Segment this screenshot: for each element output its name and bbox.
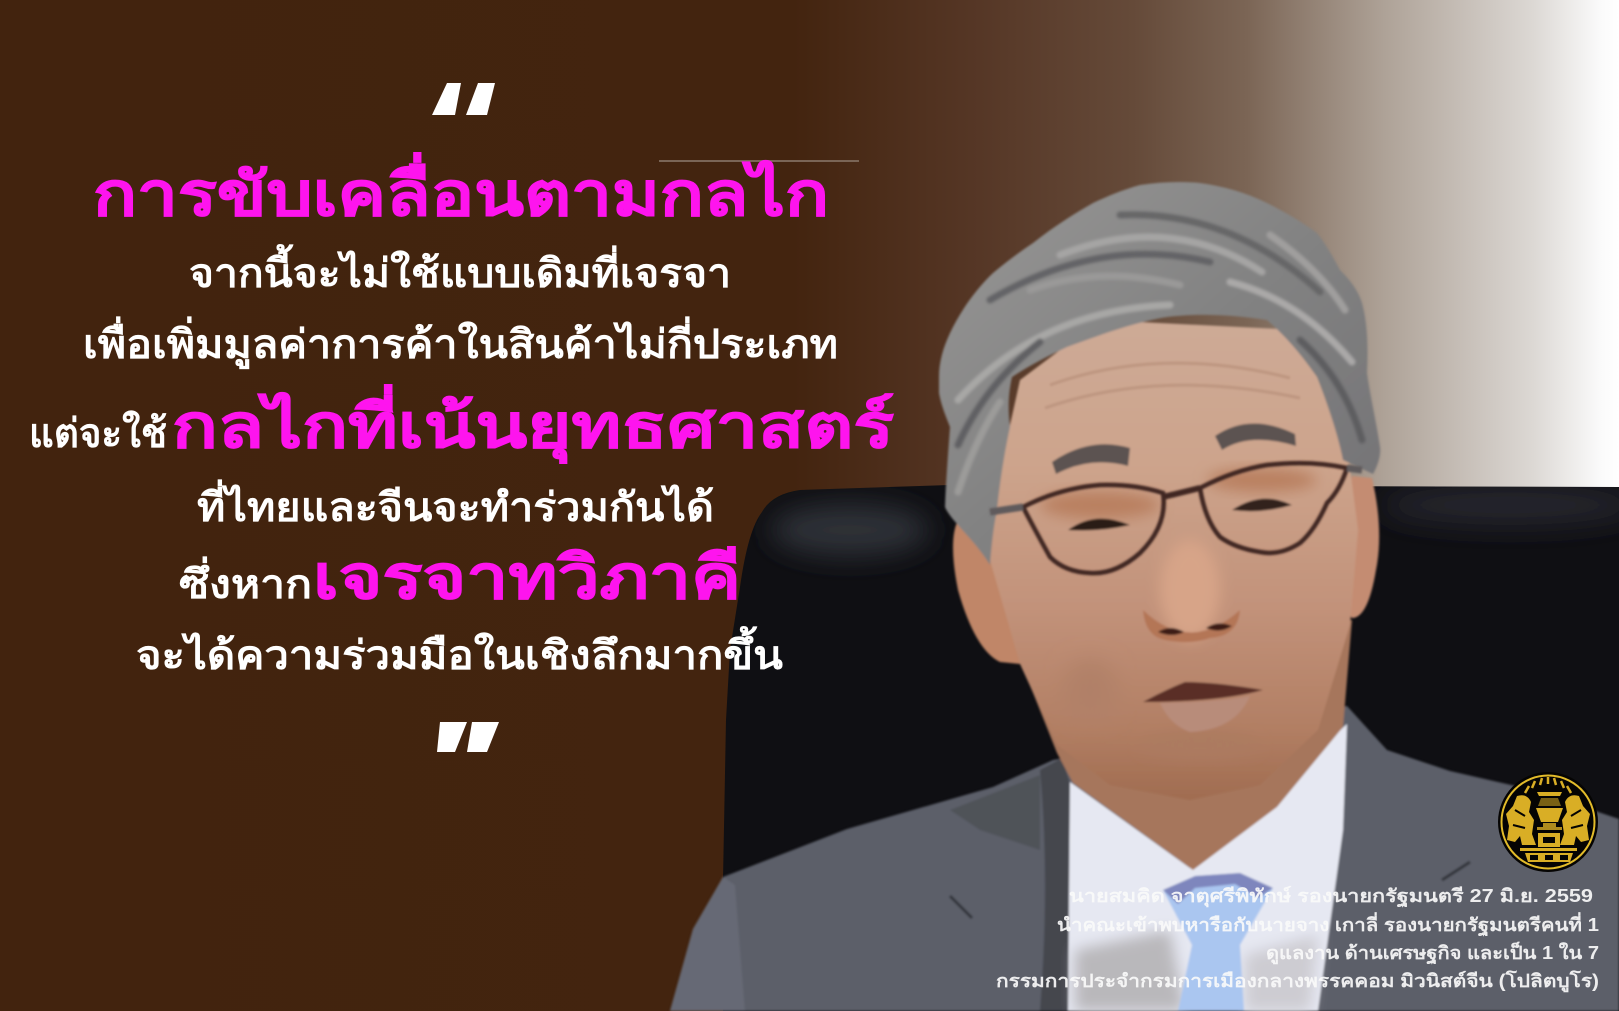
shading: cheek xyxy=(1064,660,1116,720)
quote line 4 highlight: กลไกที่เน้นยุทธศาสตร์ xyxy=(172,384,894,464)
upper lip xyxy=(1143,682,1263,702)
seal: left lion xyxy=(1506,795,1536,845)
photo: man in suit xyxy=(670,182,1619,1011)
right eye xyxy=(1232,499,1292,511)
faint line above headline xyxy=(659,160,859,162)
forehead lines xyxy=(1045,363,1300,408)
suit jacket xyxy=(670,706,1619,1011)
hair xyxy=(939,182,1380,565)
quote line 4 lead: แต่จะใช้ xyxy=(29,410,167,456)
right ear xyxy=(1335,476,1379,618)
shading: chin lower xyxy=(1140,731,1260,759)
necktie xyxy=(1163,873,1273,1011)
nose base xyxy=(1143,610,1240,642)
shading: under eyes xyxy=(1040,491,1160,519)
chair back xyxy=(720,480,1619,1011)
right eyebrow xyxy=(1215,423,1296,450)
seal: lion detail xyxy=(1513,810,1583,828)
lower lip xyxy=(1160,696,1250,732)
glasses xyxy=(990,463,1362,573)
quote open icon xyxy=(432,83,495,115)
shading: right eye xyxy=(1207,468,1317,492)
caption line 3: ดูแลงาน ด้านเศรษฐกิจ และเป็น 1 ใน 7 xyxy=(1266,941,1599,965)
chair highlight right xyxy=(1380,485,1619,525)
shoulder shadow xyxy=(950,775,1040,850)
left eyebrow xyxy=(1052,444,1130,474)
buttonhole left xyxy=(950,896,972,918)
suit light sleeve fold xyxy=(670,877,745,1011)
face xyxy=(990,320,1358,800)
shirt shade right xyxy=(1245,935,1318,1011)
nostrils xyxy=(1158,623,1232,635)
quote line 3: เพื่อเพิ่มมูลค่าการค้าในสินค้าไม่กี่ประเภท xyxy=(83,316,838,369)
quote line 7: จะได้ความร่วมมือในเชิงลึกมากขึ้น xyxy=(136,626,783,678)
left ear xyxy=(953,515,1030,664)
shirt shade xyxy=(1075,930,1185,1011)
shading: nose xyxy=(1160,540,1220,640)
left eye xyxy=(1068,519,1130,530)
icon: government seal xyxy=(1498,772,1598,872)
quote line 2: จากนี้จะไม่ใช้แบบเดิมที่เจรจา xyxy=(189,244,731,296)
tie knot shadow xyxy=(1163,873,1273,904)
lapel shadow left xyxy=(1040,758,1072,1011)
caption line 1: นายสมคิด จาตุศรีพิทักษ์ รองนายกรัฐมนตรี 27 มิ.ย. 2559 xyxy=(1069,885,1593,908)
buttonhole right xyxy=(1442,862,1470,880)
caption xyxy=(996,885,1599,993)
shirt xyxy=(1068,724,1347,1011)
quote close icon xyxy=(437,722,499,752)
neck and jaw base xyxy=(1020,620,1352,870)
caption line 2: นำคณะเข้าพบหารือกับนายจาง เกาลี่ รองนายกรัฐมนตรีคนที่ 1 xyxy=(1057,912,1599,937)
photo: leather chair xyxy=(720,480,1619,1011)
seal: urn and pedestal xyxy=(1520,792,1577,862)
caption line 4: กรรมการประจำกรมการเมืองกลางพรรคคอม มิวนิสต์จีน (โปลิตบูโร) xyxy=(996,970,1599,993)
seal: right lion xyxy=(1560,795,1590,845)
quote line 6 highlight: เจรจาทวิภาคี xyxy=(313,544,741,611)
seal: crown rays xyxy=(1525,777,1571,793)
quote line 6 lead: ซึ่งหาก xyxy=(179,556,312,607)
quote line 5: ที่ไทยและจีนจะทำร่วมกันได้ xyxy=(197,479,714,530)
hair strands xyxy=(958,215,1362,492)
chair highlight left xyxy=(770,504,930,556)
headline: การขับเคลื่อนตามกลไก xyxy=(93,152,829,228)
